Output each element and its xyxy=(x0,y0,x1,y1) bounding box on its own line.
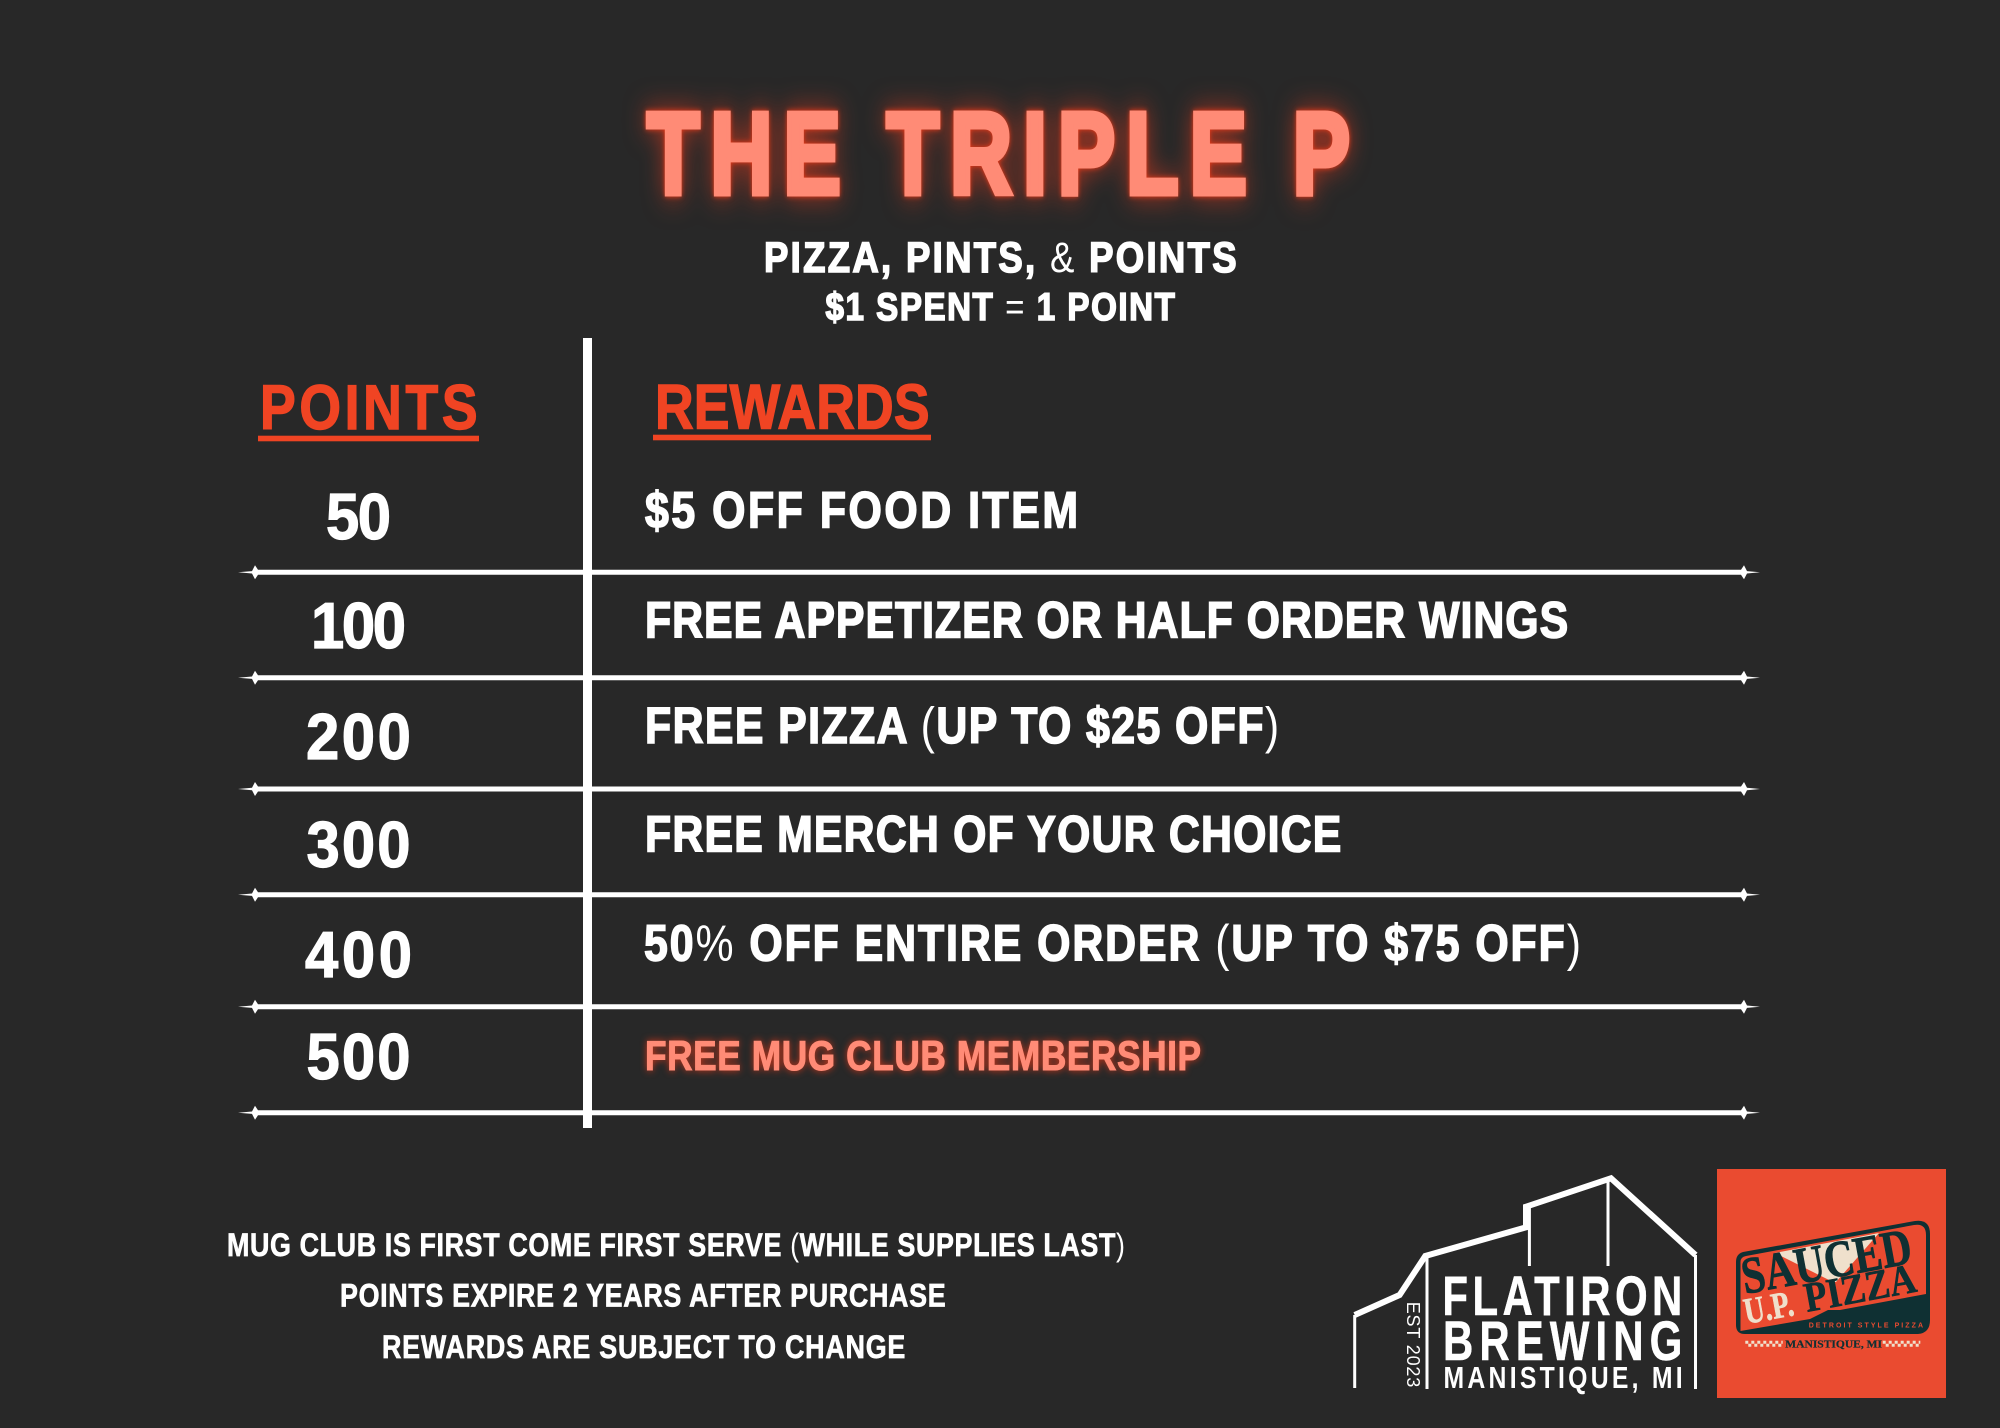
logo: Sauced U.P. Pizza xyxy=(1717,1169,1946,1398)
logo: Flatiron Brewing xyxy=(1355,1178,1696,1395)
rewards table xyxy=(238,338,1760,1128)
footnotes: REWARDS ARE SUBJECT TO CHANGE xyxy=(382,1330,905,1366)
row: 300 points xyxy=(306,805,1341,882)
row: 400 points: 50% OFF ENTIRE ORDER (UP TO $75 OFF) xyxy=(644,914,1581,971)
footnotes: POINTS EXPIRE 2 YEARS AFTER PURCHASE xyxy=(340,1279,946,1314)
row: 100 points: FREE APPETIZER OR HALF ORDER WINGS xyxy=(645,591,1568,648)
row: 200 points: 200 xyxy=(306,701,411,774)
subtitle: $1 SPENT = 1 POINT xyxy=(826,285,1175,329)
logo: Flatiron Brewing: MANISTIQUE, MI xyxy=(1444,1360,1683,1395)
row: 200 points: FREE PIZZA (UP TO $25 OFF) xyxy=(645,696,1279,754)
row: 100 points: 100 xyxy=(311,590,406,663)
logo: Sauced U.P. Pizza: U.P. xyxy=(1740,1283,1797,1333)
logo: Sauced U.P. Pizza: MANISTIQUE, MI xyxy=(1785,1338,1882,1350)
logo: Flatiron Brewing: EST 2023 xyxy=(1403,1302,1423,1387)
row: 500 points: FREE MUG CLUB MEMBERSHIP xyxy=(645,1033,1201,1080)
logo: Sauced U.P. Pizza: SAUCED xyxy=(1737,1218,1916,1306)
row: 300 points: FREE MERCH OF YOUR CHOICE xyxy=(645,805,1341,862)
badge xyxy=(1736,1221,1930,1334)
title: THE TRIPLE P xyxy=(647,89,1350,219)
logo: Flatiron Brewing: FLATIRON xyxy=(1442,1265,1682,1327)
heading: rewards: REWARDS xyxy=(655,372,930,442)
row: 50 points: $5 OFF FOOD ITEM xyxy=(645,481,1078,538)
row: 200 points xyxy=(306,696,1279,774)
row: 100 points xyxy=(311,590,1568,663)
row: 500 points xyxy=(306,1021,1201,1094)
row: 400 points xyxy=(305,914,1581,992)
footnotes: MUG CLUB IS FIRST COME FIRST SERVE (WHILE SUPPLIES LAST) xyxy=(227,1228,1125,1264)
footnotes xyxy=(227,1228,1125,1366)
heading: points: POINTS xyxy=(260,373,478,443)
logo: Sauced U.P. Pizza: DETROIT STYLE PIZZA xyxy=(1809,1323,1923,1330)
row: 50 points: 50 xyxy=(326,481,391,554)
subtitle: PIZZA, PINTS, & POINTS xyxy=(764,234,1237,282)
subtitle xyxy=(764,234,1237,329)
building outline xyxy=(1355,1178,1696,1389)
row: 500 points: 500 xyxy=(306,1021,410,1094)
row: 50 points xyxy=(326,481,1078,554)
logo: Sauced U.P. Pizza: PIZZA xyxy=(1800,1256,1921,1322)
row: 300 points: 300 xyxy=(306,809,410,882)
row: 400 points: 400 xyxy=(305,919,412,992)
checker strips xyxy=(1745,1342,1920,1345)
logo: Flatiron Brewing: BREWING xyxy=(1443,1310,1682,1372)
